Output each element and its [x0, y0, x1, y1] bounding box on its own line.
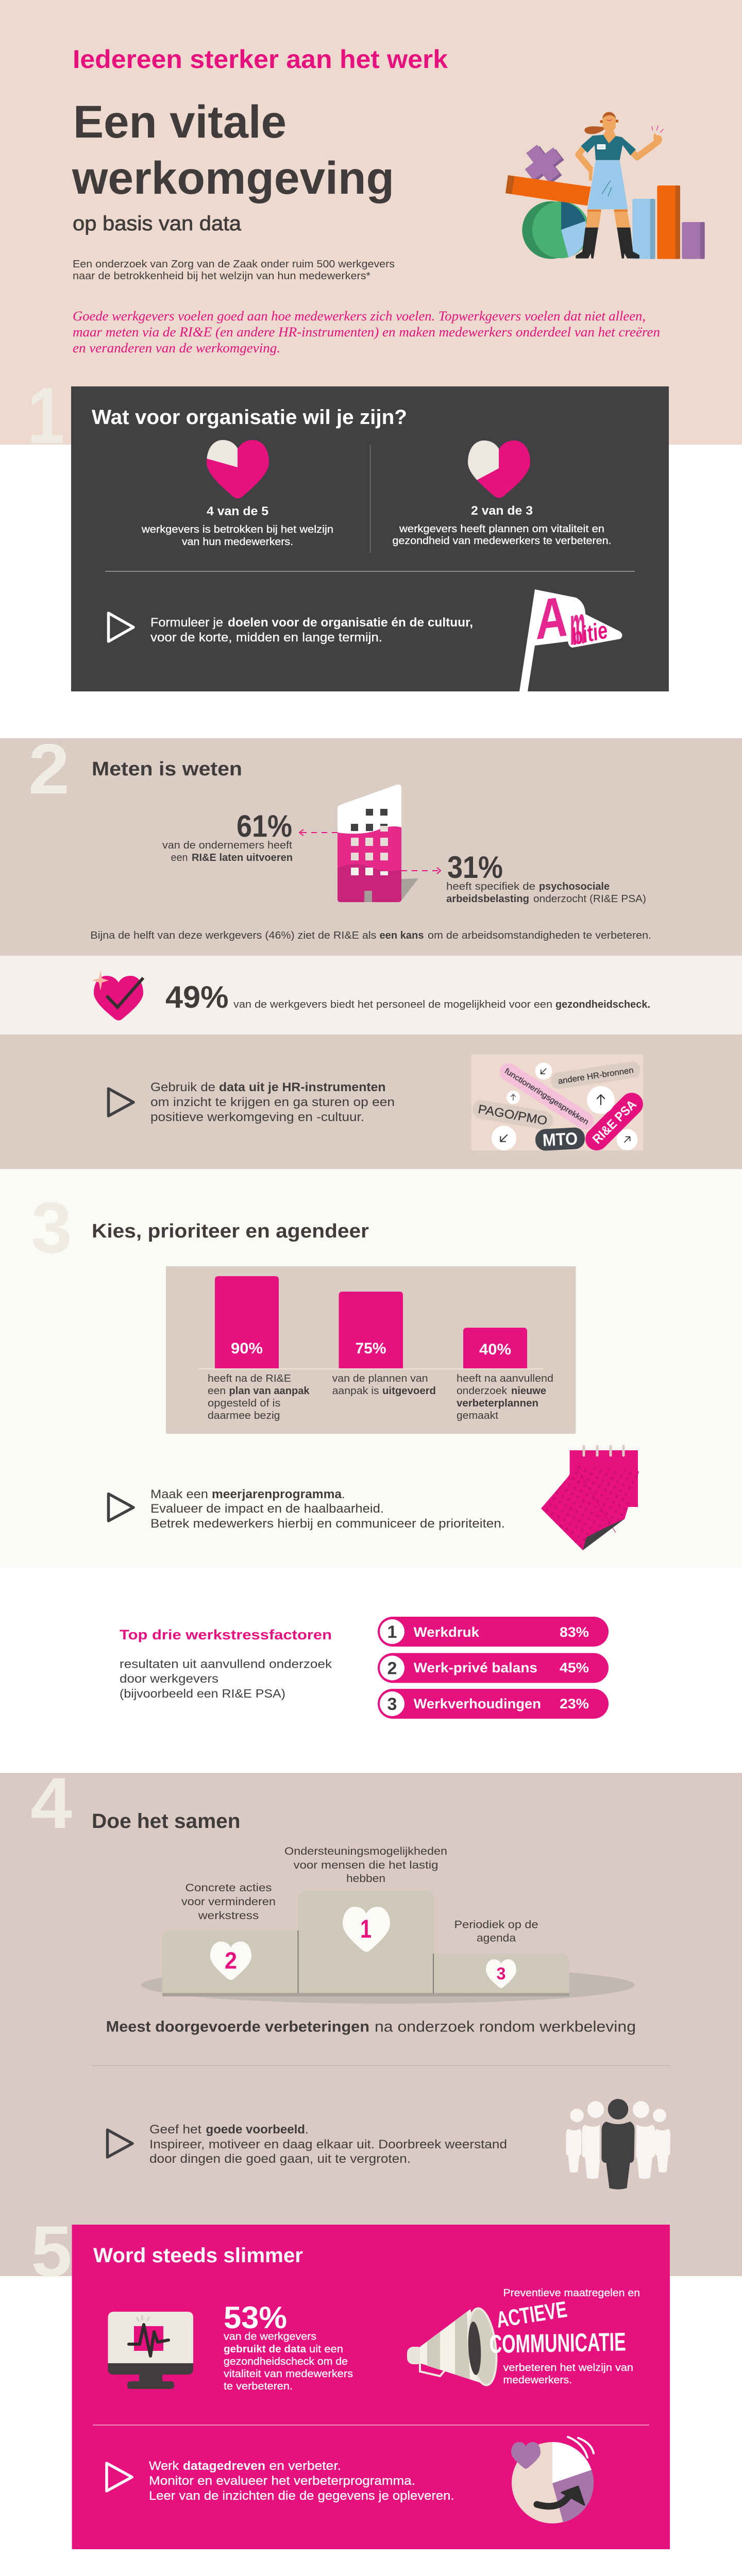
action text: meerjarenprogramma: .: [342, 1487, 345, 1501]
factor 3: werkverhoudingen: Werkverhoudingen: [414, 1696, 541, 1711]
intro text: Een onderzoek van Zorg van de Zaak onder ruim 500 werkgevers: [73, 259, 395, 270]
panel: organisatie: [71, 386, 669, 691]
stat: 31%: psychosociale: [539, 881, 610, 892]
factor 1: werkdruk: Werkdruk: [414, 1624, 480, 1640]
pill: PAGO/PMO: PAGO/PMO: [477, 1102, 548, 1128]
action text: datagedreven: Werk: [149, 2459, 179, 2473]
stat: 61%: van de ondernemers heeft: [162, 840, 292, 851]
action text: goede voorbeeld: Geef het: [149, 2123, 201, 2137]
podium block 1: [298, 1891, 434, 1993]
action text: datagedreven: [149, 2459, 454, 2503]
label: plan van aanpak: een: [208, 1385, 226, 1397]
label: uitgevoerd: [332, 1373, 436, 1397]
factor 1: werkdruk: 1: [387, 1622, 397, 1642]
panel: word steeds slimmer: [72, 2225, 670, 2549]
label: uitgevoerd: van de plannen van: [332, 1373, 428, 1384]
icon: heart with check: [92, 970, 143, 1021]
label: verbeterplannen: [457, 1373, 553, 1421]
action text: goede voorbeeld: door dingen die goed gaan, uit te vergroten.: [149, 2152, 411, 2166]
podium labels: Concrete acties: [185, 1882, 272, 1894]
podium caption: Meest doorgevoerde verbeteringen: [106, 2019, 369, 2035]
text: kans: [90, 930, 651, 941]
podium block 2: [162, 1930, 298, 1993]
stat: 31%: onderzocht (RI&E PSA): [533, 893, 646, 905]
action text: meerjarenprogramma: meerjarenprogramma: [212, 1487, 342, 1501]
action text: meerjarenprogramma: Evalueer de impact en de haalbaarheid.: [150, 1502, 384, 1516]
label: verbeterplannen: gemaakt: [457, 1410, 498, 1421]
icon: pie with arrow and heart: [511, 2437, 594, 2523]
podium caption: na onderzoek rondom werkbeleving: [375, 2019, 636, 2035]
heading: Word steeds slimmer: [93, 2244, 303, 2267]
section number 1: 1: [27, 371, 64, 460]
pill: MTO: [535, 1127, 585, 1151]
icon: ambitie flag: [519, 585, 622, 691]
bar chart panel: [166, 1266, 576, 1434]
action text: goede voorbeeld: .: [305, 2123, 309, 2137]
pill: PAGO/PMO: [471, 1099, 554, 1131]
kicker title: Iedereen sterker aan het werk: [73, 45, 448, 74]
action text: meerjarenprogramma: [150, 1487, 505, 1531]
purple cross: [529, 149, 560, 179]
top three stress factors text: Top drie werkstressfactoren: [120, 1627, 332, 1642]
factor 1: werkdruk: [378, 1617, 609, 1647]
heart 1: 1: [360, 1914, 372, 1943]
text: actieve communicatie: COMMUNICATIE: [489, 2327, 626, 2359]
podium labels: voor verminderen: [181, 1896, 276, 1908]
label: plan van aanpak: opgesteld of is: [208, 1398, 280, 1409]
podium labels: Ondersteuningsmogelijkheden: [284, 1845, 447, 1857]
text: actieve communicatie: [489, 2287, 640, 2386]
text: actieve communicatie: ACTIEVE: [495, 2297, 569, 2333]
main title: werkomgeving: [72, 152, 394, 204]
label: plan van aanpak: heeft na de RI&E: [208, 1373, 291, 1384]
action text: data: Gebruik de: [150, 1080, 215, 1094]
hero illustration: woman with charts: [505, 112, 705, 259]
main title: [72, 96, 394, 204]
action text: datagedreven: Leer van de inzichten die de gegevens je opleveren.: [149, 2489, 454, 2503]
heading: meten is weten: Meten is weten: [92, 758, 242, 780]
podium labels: agenda: [477, 1932, 516, 1944]
podium chart: [141, 1891, 635, 2004]
bar: 40%: [463, 1328, 527, 1369]
icon: calendar: [541, 1446, 639, 1550]
label: verbeterplannen: heeft na aanvullend: [457, 1373, 553, 1384]
action text: data: [150, 1080, 395, 1124]
heading: Wat voor organisatie wil je zijn?: [92, 406, 407, 429]
factor 2: werk-prive balans: 45%: [560, 1660, 589, 1675]
icon: megaphone: [407, 2307, 500, 2387]
bar: 75%: 75%: [356, 1340, 386, 1357]
stat: 2 van de 3: gezondheid van medewerkers te verbeteren.: [393, 535, 611, 547]
podium labels: [181, 1845, 538, 1944]
podium labels: hebben: [346, 1873, 385, 1885]
podium block 3: [433, 1954, 569, 1993]
podium labels: Periodiek op de: [454, 1919, 538, 1931]
action text: meerjarenprogramma: Maak een: [150, 1487, 208, 1501]
intro text: naar de betrokkenheid bij het welzijn van hun medewerkers*: [73, 270, 370, 282]
factor 1: werkdruk: 83%: [560, 1624, 589, 1640]
factor 3: werkverhoudingen: [378, 1689, 609, 1719]
woman figure: [576, 112, 664, 259]
action text: datagedreven: Monitor en evalueer het verbeterprogramma.: [149, 2474, 415, 2488]
icon: play arrow: [108, 613, 133, 641]
icon: monitor with pulse: [108, 2312, 193, 2389]
pink italic statement: en veranderen van de werkomgeving.: [73, 341, 280, 355]
stat: 49%: 49%: [165, 980, 229, 1014]
pink italic statement: maar meten via de RI&E (en andere HR-instrumenten) en maken medewerkers onderdeel van het creëren: [73, 325, 660, 340]
stat: 53%: 53%: [224, 2300, 287, 2335]
action text: goede voorbeeld: goede voorbeeld: [206, 2123, 305, 2137]
section number 2: 2: [28, 730, 70, 809]
stat: 61%: 61%: [237, 809, 292, 843]
stat: 61%: een: [171, 852, 188, 863]
icon: ambitie flag: m: [570, 594, 585, 657]
factor 2: werk-prive balans: 2: [387, 1659, 397, 1679]
stat: 53%: gezondheidscheck om de: [224, 2356, 348, 2367]
action text: goede voorbeeld: [149, 2123, 507, 2166]
section number 3: 3: [31, 1187, 72, 1268]
icon: play arrow: [107, 2463, 132, 2491]
label: plan van aanpak: [208, 1373, 310, 1421]
podium caption: [106, 2019, 636, 2035]
bar: 90%: 90%: [231, 1340, 263, 1357]
heart 2: 2: [225, 1947, 237, 1974]
main title: Een vitale: [73, 96, 286, 147]
podium labels: voor mensen die het lastig: [294, 1859, 438, 1871]
text: actieve communicatie: Preventieve maatregelen en: [503, 2287, 640, 2299]
heading: doe het samen: Doe het samen: [92, 1810, 240, 1833]
pill: andere HR-bronnen: [550, 1060, 642, 1090]
label: uitgevoerd: uitgevoerd: [382, 1385, 436, 1397]
stat: 49%: gezondheidscheck.: [555, 999, 650, 1010]
factor 3: werkverhoudingen: 23%: [560, 1696, 589, 1711]
pink italic statement: [73, 309, 660, 355]
stat: 31%: arbeidsbelasting: [446, 893, 529, 905]
stat: 4 van de 5: van hun medewerkers.: [182, 536, 293, 548]
arrow: to 31%: [401, 868, 441, 874]
action text: voor de korte, midden en lange termijn.: [150, 631, 382, 645]
pie chart: [522, 201, 589, 259]
icon: play arrow: [108, 1089, 133, 1116]
stat: 53%: gebruikt de data: [224, 2344, 307, 2355]
stat: 4 van de 5: werkgevers is betrokken bij het welzijn: [141, 524, 333, 535]
stat: 61%: [162, 809, 293, 863]
bar: 75%: [339, 1292, 403, 1369]
stat: 53%: vitaliteit van medewerkers: [224, 2368, 353, 2380]
stat: 49%: [165, 980, 650, 1014]
heart 1: [343, 1907, 390, 1952]
text: kans: om de arbeidsomstandigheden te verbeteren.: [428, 930, 651, 941]
pink italic statement: Goede werkgevers voelen goed aan hoe medewerkers zich voelen. Topwerkgevers voelen dat niet alleen,: [73, 309, 646, 324]
top three stress factors text: door werkgevers: [120, 1672, 218, 1685]
stat: 4 van de 5: [141, 504, 333, 548]
text: actieve communicatie: medewerkers.: [503, 2375, 572, 2386]
action text: data: positieve werkomgeving en -cultuur.: [150, 1110, 364, 1124]
subtitle: op basis van data: [73, 212, 242, 235]
action text: datagedreven: datagedreven: [183, 2459, 265, 2473]
top three stress factors text: [120, 1627, 332, 1700]
label: plan van aanpak: plan van aanpak: [229, 1385, 310, 1397]
icon: group of people: [566, 2099, 670, 2191]
label: verbeterplannen: onderzoek: [457, 1385, 508, 1397]
pill: RI&E PSA: [581, 1088, 648, 1155]
action text: [150, 616, 473, 645]
action text: goede voorbeeld: Inspireer, motiveer en daag elkaar uit. Doorbreek weerstand: [149, 2138, 507, 2151]
stat: 53%: te verbeteren.: [224, 2381, 293, 2392]
panel: HR instruments tag cloud: [471, 1054, 648, 1155]
stat: 31%: 31%: [447, 850, 503, 885]
heart 3: 3: [497, 1964, 506, 1983]
stat: 2 van de 3: werkgevers heeft plannen om vitaliteit en: [399, 523, 604, 535]
text: actieve communicatie: verbeteren het welzijn van: [503, 2362, 633, 2374]
heart 3: [486, 1959, 516, 1988]
label: plan van aanpak: daarmee bezig: [208, 1410, 280, 1421]
heart 2: [210, 1941, 251, 1980]
section number 4: 4: [30, 1762, 72, 1843]
action text: Formuleer je: [150, 616, 223, 630]
heading: kies prioriteer: Kies, prioriteer en agendeer: [92, 1221, 369, 1242]
stat: 49%: van de werkgevers biedt het personeel de mogelijkheid voor een: [233, 999, 552, 1010]
stat: 53%: uit een: [309, 2344, 343, 2355]
bar charts: [632, 185, 705, 259]
icon: play arrow: [107, 2130, 132, 2157]
icons: arrows in circles: [492, 1062, 638, 1150]
label: verbeterplannen: nieuwe: [511, 1385, 546, 1397]
icon: ambitie flag: A: [536, 585, 568, 652]
pill: functioneringsgesprekken: functioneringsgesprekken: [503, 1066, 590, 1127]
stat: 53%: [224, 2300, 353, 2392]
icon: heart 2 of 3: [468, 440, 530, 498]
icon: play arrow: [108, 1494, 133, 1521]
label: uitgevoerd: aanpak is: [332, 1385, 379, 1397]
pill: functioneringsgesprekken: [496, 1060, 597, 1133]
action text: doelen voor de organisatie én de cultuur,: [228, 616, 473, 630]
top three stress factors text: (bijvoorbeeld een RI&E PSA): [120, 1687, 285, 1700]
orange beam: [505, 175, 591, 206]
stat: 4 van de 5: 4 van de 5: [207, 504, 268, 518]
factor 3: werkverhoudingen: 3: [387, 1694, 397, 1714]
icon: ambitie flag: bitie: [569, 616, 610, 650]
pill: RI&E PSA: RI&E PSA: [590, 1097, 639, 1147]
top three stress factors text: resultaten uit aanvullend onderzoek: [120, 1657, 332, 1670]
bar: 90%: [215, 1276, 279, 1369]
stat: 2 van de 3: [393, 504, 611, 547]
stat: 31%: [446, 850, 646, 905]
section number 5: 5: [31, 2211, 72, 2292]
factor 2: werk-prive balans: [378, 1653, 609, 1683]
stat: 61%: RI&E laten uitvoeren: [192, 852, 293, 863]
action text: data: data uit je HR-instrumenten: [219, 1080, 385, 1094]
icon: heart 4 of 5: [207, 440, 269, 499]
stat: 2 van de 3: 2 van de 3: [471, 504, 533, 518]
action text: datagedreven: en verbeter.: [269, 2459, 341, 2473]
pill: andere HR-bronnen: andere HR-bronnen: [558, 1066, 634, 1086]
factor 2: werk-prive balans: Werk-privé balans: [414, 1660, 537, 1675]
intro text: [73, 259, 395, 282]
podium labels: werkstress: [198, 1910, 259, 1922]
text: kans: Bijna de helft van deze werkgevers (46%) ziet de RI&E als: [90, 930, 376, 941]
stat: 31%: heeft specifiek de: [446, 881, 535, 892]
action text: data: om inzicht te krijgen en ga sturen op een: [150, 1095, 395, 1109]
bar: 40%: 40%: [479, 1341, 511, 1358]
stat: 53%: van de werkgevers: [224, 2331, 316, 2343]
icon: building chart: [338, 785, 418, 902]
label: verbeterplannen: verbeterplannen: [457, 1398, 538, 1409]
text: kans: een kans: [379, 930, 424, 941]
pill: MTO: MTO: [542, 1129, 578, 1150]
arrow: to 61%: [299, 829, 338, 836]
action text: meerjarenprogramma: Betrek medewerkers hierbij en communiceer de prioriteiten.: [150, 1517, 505, 1531]
